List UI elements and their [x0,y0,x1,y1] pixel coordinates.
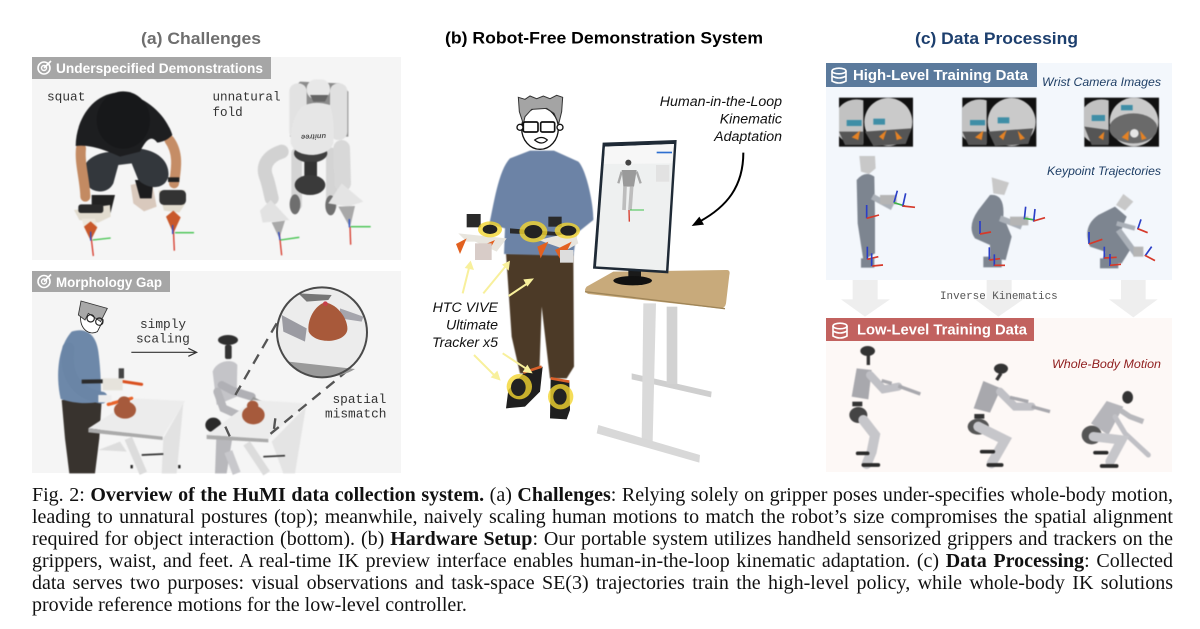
panel label: underspecified demonstrations [32,57,271,79]
left gripper [456,214,507,260]
keypoint figure squatting [972,177,1045,267]
inverse kinematics arrows [841,280,1158,317]
heading: (c) Data Processing: (c) Data Processing [915,29,1078,48]
teddy on right table [242,401,265,424]
left gripper axes [91,232,111,256]
robot right gripper [328,183,363,207]
figure: person squatting seen from above [74,91,194,256]
head cartoon [517,95,563,149]
tracker right foot [548,384,573,409]
panel label: morphology gap: Morphology Gap [56,274,162,290]
panel: underspecified demonstrations [32,57,401,260]
tracker right wrist [555,223,580,239]
monitor on table [585,140,730,463]
annotation: HTC VIVE tracker: Ultimate [446,318,498,334]
figure: robot with unnatural fold seen from above [260,79,371,255]
cartoon head in profile [78,301,107,333]
heading: (b) Robot-Free Demonstration System: (b) Robot-Free Demonstration System [445,28,763,48]
panel label: morphology gap [32,271,170,292]
annotation: human-in-the-loop: Adaptation [713,129,782,145]
keypoint figure standing [857,156,915,268]
robot left gripper [260,200,289,223]
camera pair 1 [834,98,913,147]
annotation: human-in-the-loop: Human-in-the-Loop [660,94,782,110]
arrow: towards monitor [692,153,743,226]
annotation: HTC VIVE tracker: Tracker x5 [432,335,498,351]
annotation: human-in-the-loop: Kinematic [720,112,782,128]
robot bending [1082,391,1148,466]
annotation: wrist camera images: Wrist Camera Images [1042,75,1161,89]
right handheld gripper [158,190,186,233]
heading: (a) Challenges: (a) Challenges [141,29,261,48]
figure caption: Fig. 2: Overview of the HuMI data collection system. (a) Challenges: Relying solely on gripper poses under-specifies whole-body motion, [32,484,1173,506]
tracker left wrist [478,221,502,237]
figure caption: required for object interaction (bottom). (b) Hardware Setup: Our portable system utilizes handheld sensorized grippers and trackers on the [32,528,1173,550]
panel label: low-level: Low-Level Training Data [857,322,1028,338]
camera pair 3 [1079,98,1159,147]
tracker left foot [507,374,532,399]
teddy on left table [114,396,136,419]
right table [207,400,307,473]
annotation: unnatural fold: fold [212,106,243,120]
robot left gripper axes [279,232,299,255]
tracker waist [519,221,547,242]
brand on robot back: unitree [301,132,326,142]
arrow: simply scaling [131,348,197,356]
panel: robot-free demonstration system [432,94,782,463]
left handheld gripper [74,204,111,241]
camera pair 2 [957,98,1036,147]
gripper held by human [98,368,142,404]
annotation: HTC VIVE tracker: HTC VIVE [433,300,499,316]
panel label: high-level: High-Level Training Data [853,68,1029,84]
annotation: unnatural fold: unnatural [212,90,281,104]
panel label: underspecified demonstrations: Underspecified Demonstrations [56,60,263,76]
annotation: spatial mismatch: spatial [332,392,386,407]
right gripper [537,217,578,263]
wrist camera image pairs [834,98,1159,147]
panel: low-level training data [826,318,1172,472]
panel: morphology gap [32,271,401,473]
demonstrator with trackers [456,95,593,419]
screen robot preview [618,160,644,222]
zoom callout dashed lines [225,323,348,438]
annotation: keypoint trajectories: Keypoint Trajectories [1047,164,1161,178]
left table [88,398,185,473]
robot scaled to human [205,335,277,473]
annotation: whole-body motion: Whole-Body Motion [1052,357,1161,371]
robot squatting [968,364,1050,465]
panel: high-level training data [826,63,1172,280]
annotation: spatial mismatch: mismatch [325,406,386,422]
robot right gripper axes [349,219,371,245]
figure caption: provide reference motions for the low-level controller. [32,594,467,616]
standing table [585,270,730,463]
yellow tracker arrows [463,261,534,381]
keypoint figure bending [1087,194,1155,268]
robot standing [849,346,920,465]
figure caption [32,484,1173,616]
annotation: simply scaling: simply [140,317,186,332]
zoom callout circle [277,287,367,377]
annotation: squat: squat [47,90,85,104]
annotation: inverse kinematics: Inverse Kinematics [940,291,1058,303]
panel label: low-level [826,318,1034,341]
right gripper axes [173,225,194,251]
figure caption: leading to unnatural postures (top); meanwhile, naively scaling human motions to match the robot’s size compromises the spatial alignment [32,506,1173,528]
figure caption: data serves two purposes: visual observations and task-space SE(3) trajectories train the high-level policy, while whole-body IK solutions [32,572,1173,594]
scene: human, robot and tables [58,287,367,473]
annotation: simply scaling: scaling [136,332,190,346]
panel label: high-level [826,63,1037,87]
human demonstrator side view [58,330,142,473]
figure caption: grippers, waist, and feet. A real-time IK preview interface enables human-in-the-loop kinematic adaptation. (c) Data Processing: Collected [32,550,1173,572]
